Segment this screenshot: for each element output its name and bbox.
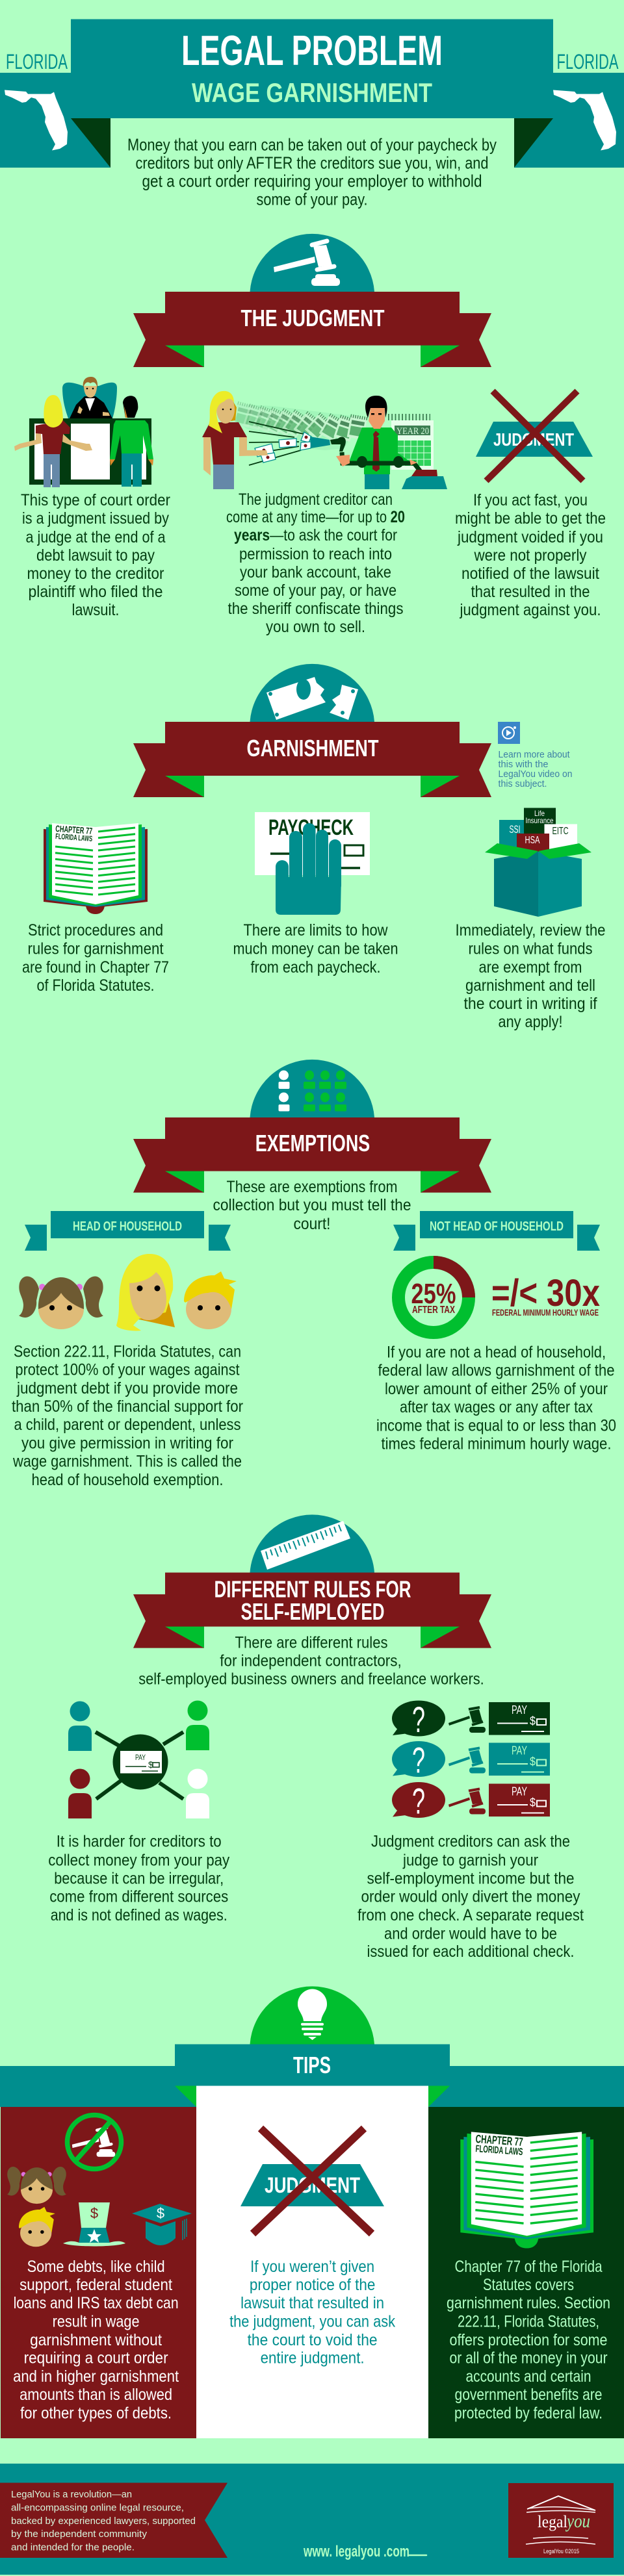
text: debts: and in higher garnishment (13, 2367, 179, 2386)
person: white (186, 1768, 209, 1818)
text: exemptions intro: These are exemptions from (226, 1178, 398, 1196)
text: proper notice: the court to void the (248, 2331, 378, 2349)
main banner (71, 19, 553, 118)
text: Chapter 77: Statutes covers (483, 2276, 574, 2294)
text: self-employed intro: self-employed business owners and freelance workers. (138, 1670, 484, 1688)
ribbon heading: GARNISHMENT (247, 735, 379, 761)
text: court order: lawsuit. (72, 601, 120, 619)
text: self-employed intro: There are different rules (235, 1633, 387, 1651)
icon: judgment crossed out: JUDGMENT (265, 2173, 360, 2198)
text: proper notice: proper notice of the (250, 2276, 375, 2294)
icon: Chapter 77 book: FLORIDA LAWS (475, 2143, 523, 2158)
chart: 25% after tax donut (398, 1262, 469, 1333)
logo: legal (538, 2512, 567, 2531)
text: judgment creditors can ask: self-employment income but the (367, 1870, 575, 1888)
person: teal (68, 1701, 92, 1751)
icon: box of exempt funds: HSA (525, 835, 540, 846)
text: judgment creditors can ask: judge to garnish your (402, 1852, 538, 1870)
text: exemptions intro: court! (294, 1215, 330, 1233)
text: Chapter 77 (447, 2258, 610, 2422)
Florida label left: FLORIDA (6, 50, 68, 73)
icon: Chapter 77 book (44, 823, 148, 914)
text: self-employed intro (138, 1633, 484, 1688)
intro text: Money that you earn can be taken out of your paycheck by (127, 135, 497, 155)
text: debts (13, 2258, 179, 2422)
text: debts: amounts than is allowed (20, 2386, 172, 2404)
tips banner heading: TIPS (293, 2052, 331, 2078)
about ribbon: and intended for the people. (11, 2542, 135, 2553)
ribbon heading: SELF-EMPLOYED (240, 1598, 385, 1625)
icon: Chapter 77 book: CHAPTER 77 (475, 2132, 523, 2149)
logo: LegalYou ©2015 (543, 2548, 579, 2555)
about ribbon (0, 2483, 228, 2558)
text: review the rules: garnishment and tell (465, 976, 595, 995)
video link text: LegalYou video on (498, 769, 572, 780)
text: proper notice: entire judgment. (261, 2349, 365, 2367)
icon: box of exempt funds: Insurance (525, 816, 554, 825)
text: proper notice (229, 2258, 396, 2367)
text: harder to collect: come from different sources (49, 1888, 228, 1906)
illustration: four payers around one check: PAY (135, 1753, 146, 1762)
icon: no gavel (68, 2115, 121, 2169)
icon: Chapter 77 book: CHAPTER 77 (55, 823, 93, 836)
illustration: question, gavel, check row teal: PAY (512, 1744, 527, 1757)
section: tips (0, 1986, 624, 2438)
about ribbon: backed by experienced lawyers, supported (11, 2516, 196, 2527)
text: head of household exemption: Section 222.11, Florida Statutes, can (14, 1342, 241, 1360)
text: head of household exemption: judgment debt if you provide more (16, 1379, 238, 1397)
left ribbon tail with Florida map (0, 73, 110, 168)
subtitle: WAGE GARNISHMENT (192, 77, 432, 108)
video link text: this with the (498, 759, 549, 770)
text: review the rules: any apply! (498, 1013, 563, 1031)
text: Chapter 77: accounts and certain (465, 2367, 592, 2386)
ribbon heading: THE JUDGMENT (240, 305, 385, 331)
illustration: question, gavel, check row red: PAY (512, 1785, 527, 1798)
icon: girl (7, 2167, 66, 2204)
right ribbon tail with Florida map (514, 73, 624, 168)
text: court order: a judge at the end of a (26, 528, 166, 546)
illustration: question, gavel, check row dark green (392, 1699, 550, 1740)
text: judgment creditor: your bank account, take (240, 563, 391, 581)
illustration: four payers around one check (68, 1701, 209, 1818)
icon: hand over paycheck (255, 812, 370, 915)
ribbon heading: EXEMPTIONS (255, 1130, 370, 1156)
face: girl (19, 1276, 103, 1329)
illustration: judgment crossed out (476, 391, 593, 481)
text: harder to collect: collect money from your pay (48, 1852, 230, 1870)
dome with people icon (250, 1060, 374, 1117)
text: act fast (455, 491, 606, 619)
ribbon: head of household: HEAD OF HOUSEHOLD (73, 1219, 182, 1234)
panel: debts (1, 2107, 196, 2438)
icon: box of exempt funds: Life (534, 809, 545, 818)
intro text (127, 135, 497, 209)
text: judgment creditors can ask: issued for each additional check. (367, 1943, 575, 1961)
video link text (498, 749, 572, 789)
logo: you (566, 2510, 590, 2532)
text: court order: money to the creditor (27, 565, 164, 583)
text: review the rules (455, 921, 606, 1031)
text: court order: is a judgment issued by (22, 509, 169, 528)
text: proper notice: lawsuit that resulted in (240, 2294, 384, 2312)
illustration: question, gavel, check row red (392, 1780, 550, 1822)
formula: 30x federal minimum wage: =/< 30x (491, 1272, 600, 1314)
text: act fast: judgment against you. (460, 601, 601, 619)
text: review the rules: are exempt from (478, 958, 582, 976)
face: woman (116, 1254, 175, 1331)
text: judgment creditor: years—to ask the court for (234, 526, 397, 544)
icon: Chapter 77 book: FLORIDA LAWS (55, 832, 93, 843)
logo (508, 2483, 614, 2558)
text: limits: from each paycheck. (251, 958, 381, 976)
text: debts: loans and IRS tax debt can (14, 2294, 179, 2312)
ribbon: head of household (25, 1211, 231, 1251)
text: harder to collect: and is not defined as wages. (51, 1906, 228, 1924)
dome with gavel icon (250, 234, 374, 292)
text: harder to collect: It is harder for creditors to (57, 1832, 222, 1850)
text: exemptions intro: collection but you must tell the (213, 1196, 411, 1214)
text: debts: Some debts, like child (27, 2258, 165, 2276)
text: head of household exemption: you give permission in writing for (21, 1435, 233, 1453)
icon: boy (19, 2207, 55, 2247)
text: judgment creditor: come at any time—for up to 20 (226, 508, 405, 526)
illustration: judgment creditor with vacuum (202, 391, 447, 489)
text: review the rules: the court in writing if (464, 995, 597, 1013)
text: debts: for other types of debts. (20, 2404, 172, 2422)
text: strict procedures: rules for garnishment (27, 939, 164, 958)
dome with light bulb icon (250, 1986, 374, 2044)
text: judgment creditor: you own to sell. (266, 618, 365, 636)
section: garnishment (22, 664, 606, 1031)
text: judgment creditor (226, 491, 405, 636)
icon: box of exempt funds: EITC (552, 826, 568, 837)
text: court order: plaintiff who filed the (29, 583, 162, 601)
footer (0, 2464, 624, 2575)
video link icon (498, 722, 520, 744)
text: judgment creditor: The judgment creditor can (239, 491, 393, 509)
text: head of household exemption: protect 100% of your wages against (16, 1361, 240, 1379)
text: court order: This type of court order (21, 491, 170, 509)
icon: box of exempt funds: SSI (510, 823, 520, 835)
text: judgment creditors can ask: Judgment creditors can ask the (371, 1832, 570, 1850)
person: green (186, 1701, 209, 1750)
icon: box of exempt funds (485, 808, 592, 917)
icon: hand over paycheck: PAYCHECK (268, 815, 354, 840)
text: court order (21, 491, 170, 619)
ribbon: not head of household (393, 1211, 600, 1251)
text: act fast: that resulted in the (471, 583, 590, 601)
chart: 25% after tax donut: AFTER TAX (412, 1305, 455, 1316)
text: head of household exemption: head of household exemption. (31, 1471, 224, 1489)
intro text: creditors but only AFTER the creditors sue you, win, and (135, 153, 489, 173)
panel: proper notice (196, 2085, 428, 2438)
icon: judgment crossed out (240, 2128, 384, 2234)
illustration: question, gavel, check row teal: ? (412, 1740, 425, 1780)
text: debts: result in wage (53, 2313, 140, 2331)
ribbon heading (133, 722, 491, 797)
illustration: court scene (14, 377, 153, 487)
text: strict procedures: of Florida Statutes. (36, 976, 155, 995)
text: judgment creditor: the sheriff confiscate things (228, 600, 403, 618)
text: act fast: might be able to get the (455, 509, 606, 528)
text: judgment creditors can ask: order would only divert the money (361, 1888, 580, 1906)
video link text: this subject. (498, 778, 547, 789)
text: court order: debt lawsuit to pay (36, 546, 155, 565)
ribbon: not head of household: NOT HEAD OF HOUSEHOLD (430, 1219, 564, 1234)
illustration: family faces (19, 1254, 237, 1331)
intro text: some of your pay. (256, 190, 368, 209)
about ribbon: by the independent community (11, 2529, 148, 2540)
text: debts: garnishment without (30, 2331, 162, 2349)
section: the judgment (14, 234, 606, 636)
teal band (0, 2066, 624, 2107)
intro text: get a court order requiring your employer to withhold (142, 172, 482, 191)
tips banner heading (175, 2044, 450, 2107)
text: act fast: judgment voided if you (457, 528, 603, 546)
illustration: question, gavel, check row red: ? (412, 1780, 425, 1822)
illustration: judgment crossed out: JUDGMENT (493, 429, 574, 450)
text: head of household exemption: wage garnishment. This is called the (12, 1453, 242, 1471)
section: exemptions (12, 1060, 616, 1489)
text: exemptions intro (213, 1178, 411, 1233)
section: self-employed (48, 1514, 584, 1961)
text: debts: support, federal student (20, 2276, 172, 2294)
ribbon heading (133, 292, 491, 367)
illustration: judgment creditor with vacuum: YEAR 20 (396, 426, 429, 437)
icon: tax hat: $ (90, 2205, 98, 2221)
illustration: question, gavel, check row dark green: PAY (512, 1703, 527, 1716)
text: strict procedures: Strict procedures and (28, 921, 163, 939)
text: harder to collect (48, 1832, 230, 1924)
text: head of household exemption: than 50% of the financial support for (12, 1397, 243, 1416)
text: act fast: If you act fast, you (473, 491, 588, 509)
text: judgment creditor: some of your pay, or have (235, 581, 396, 600)
text: proper notice: If you weren’t given (250, 2258, 374, 2276)
text: limits (233, 921, 398, 976)
illustration: question, gavel, check row dark green: $ (530, 1715, 536, 1728)
text: act fast: were not properly (474, 546, 587, 565)
website: www. legalyou .com (303, 2543, 410, 2560)
text: review the rules: rules on what funds (468, 939, 593, 958)
icon: graduation cap (132, 2204, 192, 2245)
text: judgment creditors can ask: and order would have to be (384, 1924, 557, 1943)
text: strict procedures (22, 921, 169, 995)
chart: 25% after tax donut: 25% (411, 1278, 456, 1310)
ribbon heading: DIFFERENT RULES FOR (214, 1576, 411, 1602)
illustration: question, gavel, check row red: $ (530, 1796, 536, 1809)
text: proper notice: the judgment, you can ask (229, 2313, 396, 2331)
text: act fast: notified of the lawsuit (462, 565, 599, 583)
text: limits: much money can be taken (233, 939, 398, 958)
text: head of household exemption: a child, parent or dependent, unless (14, 1416, 240, 1434)
video link text: Learn more about (498, 749, 570, 760)
ribbon heading (133, 1572, 491, 1648)
text: limits: There are limits to how (243, 921, 388, 939)
person: red (68, 1768, 92, 1818)
text: judgment creditors can ask (358, 1832, 584, 1961)
title: LEGAL PROBLEM (181, 27, 443, 74)
about ribbon: all-encompassing online legal resource, (11, 2503, 184, 2513)
ribbon heading (133, 1117, 491, 1193)
text: self-employed intro: for independent contractors, (220, 1652, 402, 1670)
icon: Chapter 77 book (460, 2132, 593, 2249)
text: not head of household: after tax wages or any after tax (400, 1398, 593, 1416)
header banner (0, 19, 624, 168)
illustration: four payers around one check: $ (148, 1759, 153, 1770)
text: judgment creditors can ask: from one check. A separate request (358, 1906, 584, 1924)
illustration: question, gavel, check row teal: $ (530, 1755, 536, 1768)
text: judgment creditor: permission to reach into (239, 545, 392, 563)
text: harder to collect: because it can be irregular, (54, 1870, 224, 1888)
icon: tax hat (63, 2202, 125, 2247)
dome with torn money icon (250, 664, 374, 722)
illustration: question, gavel, check row dark green: ? (412, 1699, 425, 1740)
text: not head of household (376, 1344, 616, 1453)
text: head of household exemption (12, 1342, 243, 1489)
about ribbon: LegalYou is a revolution—an (11, 2489, 132, 2500)
text: strict procedures: are found in Chapter 77 (22, 958, 169, 976)
icon: graduation cap: $ (157, 2205, 164, 2221)
text: debts: requiring a court order (24, 2349, 168, 2367)
panel: Chapter 77 (428, 2107, 624, 2438)
illustration: question, gavel, check row teal (392, 1740, 550, 1780)
face: boy (184, 1271, 237, 1329)
dome with ruler icon (250, 1514, 374, 1572)
text: review the rules: Immediately, review the (455, 921, 606, 939)
